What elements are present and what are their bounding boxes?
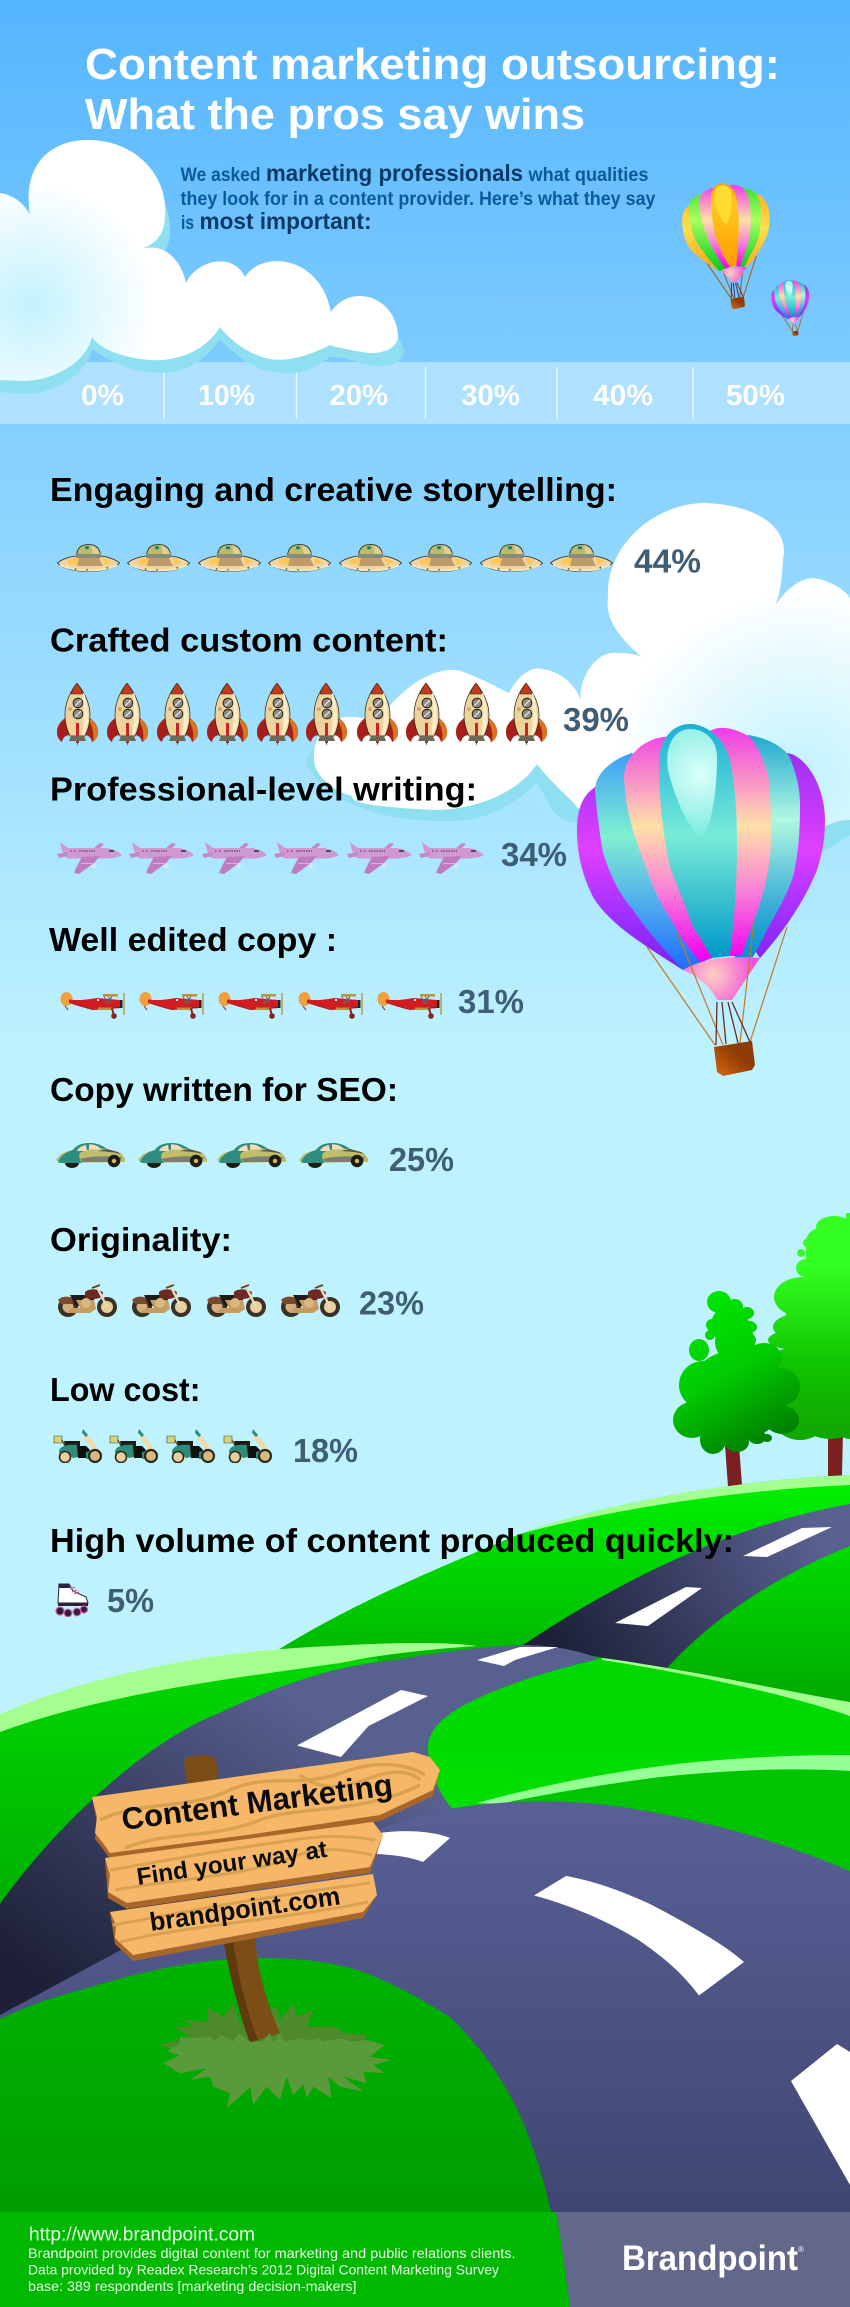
intro text: is xyxy=(181,213,194,234)
left hill xyxy=(0,1658,379,1910)
back hill xyxy=(270,1475,850,1760)
tree: large xyxy=(768,1213,850,1477)
upper road xyxy=(523,1504,850,1668)
axis labels: 50% xyxy=(726,380,785,412)
ropes xyxy=(647,920,787,1045)
axis labels: 30% xyxy=(461,380,520,412)
logo: Brandpoint: ® xyxy=(798,2245,804,2254)
balloon: small rainbow xyxy=(771,280,809,336)
row: professional-level writing 34%: Professional-level writing: xyxy=(50,770,477,808)
large front road xyxy=(0,1801,850,2307)
row: originality 23%: Originality: xyxy=(50,1221,232,1258)
intro text: they look for in a content provider. Here’s what they say xyxy=(180,189,656,210)
intro text: marketing professionals xyxy=(266,160,523,186)
row: well edited copy 31%: 31% xyxy=(458,983,524,1020)
neck xyxy=(683,957,760,1000)
intro text: what qualities xyxy=(528,165,648,186)
row: crafted custom content 39%: Crafted custom content: xyxy=(50,622,448,658)
tree: small xyxy=(673,1291,800,1487)
board: Find your way at: Find your way at xyxy=(135,1836,329,1891)
row: copy written for SEO 25% xyxy=(50,1071,454,1178)
intro text xyxy=(180,160,656,234)
board: Content Marketing: Content Marketing xyxy=(119,1767,395,1837)
right hill xyxy=(428,1658,850,1900)
cloud: top left xyxy=(0,140,404,394)
board: Find your way at xyxy=(105,1822,383,1909)
grass front xyxy=(163,2033,392,2108)
balloon: large rainbow xyxy=(577,724,825,1076)
post xyxy=(184,1755,280,2043)
middle road xyxy=(0,1645,602,2030)
footer text: http://www.brandpoint.com xyxy=(29,2224,255,2246)
board: Content Marketing xyxy=(92,1752,440,1859)
cloud: middle right xyxy=(306,503,850,854)
envelope xyxy=(577,724,825,970)
row: crafted custom content 39% xyxy=(50,622,629,746)
footer text: Brandpoint provides digital content for marketing and public relations clients. xyxy=(28,2245,516,2261)
row: low cost 18%: Low cost: xyxy=(50,1371,200,1408)
row: high volume 5%: 5% xyxy=(107,1582,154,1619)
row: high volume 5%: High volume of content produced quickly: xyxy=(50,1522,734,1559)
row: crafted custom content 39%: 39% xyxy=(563,701,629,738)
intro text: most important: xyxy=(200,208,372,234)
front hill xyxy=(0,1958,569,2307)
grass back xyxy=(160,2003,367,2052)
row: low cost 18% xyxy=(50,1371,358,1469)
row: well edited copy 31%: Well edited copy : xyxy=(49,921,337,958)
balloon: small yellow xyxy=(682,183,770,309)
footer text xyxy=(28,2224,516,2294)
row: originality 23%: 23% xyxy=(359,1284,424,1322)
footer text: base: 389 respondents [marketing decision-makers] xyxy=(28,2278,356,2294)
axis labels: 10% xyxy=(198,380,255,412)
axis labels: 40% xyxy=(593,380,653,412)
title: Content marketing outsourcing: xyxy=(85,40,780,89)
signpost xyxy=(92,1752,440,2108)
row: professional-level writing 34% xyxy=(50,770,567,874)
landscape: hills and road xyxy=(0,1475,850,2307)
row: engaging storytelling 44% xyxy=(50,471,701,580)
row: professional-level writing 34%: 34% xyxy=(501,836,567,873)
intro text: We asked xyxy=(180,165,260,186)
axis labels xyxy=(81,380,785,412)
basket xyxy=(714,1041,755,1076)
axis labels: 0% xyxy=(81,380,124,412)
axis labels: 20% xyxy=(330,380,388,412)
board: brandpoint.com: brandpoint.com xyxy=(148,1881,342,1937)
title: What the pros say wins xyxy=(85,90,585,139)
row: low cost 18%: 18% xyxy=(293,1432,358,1469)
logo: Brandpoint: Brandpoint xyxy=(622,2239,798,2278)
row: engaging storytelling 44%: Engaging and creative storytelling: xyxy=(50,471,617,508)
axis band xyxy=(0,362,850,424)
row: copy written for SEO 25%: Copy written for SEO: xyxy=(50,1071,398,1108)
row: high volume 5% xyxy=(50,1522,734,1619)
row: copy written for SEO 25%: 25% xyxy=(389,1141,454,1178)
row: originality 23% xyxy=(50,1221,424,1322)
row: well edited copy 31% xyxy=(49,921,524,1020)
title xyxy=(85,40,780,139)
footer band xyxy=(0,2212,850,2307)
footer text: Data provided by Readex Research’s 2012 Digital Content Marketing Survey xyxy=(28,2262,499,2278)
row: engaging storytelling 44%: 44% xyxy=(634,542,701,580)
board: brandpoint.com xyxy=(110,1874,377,1961)
